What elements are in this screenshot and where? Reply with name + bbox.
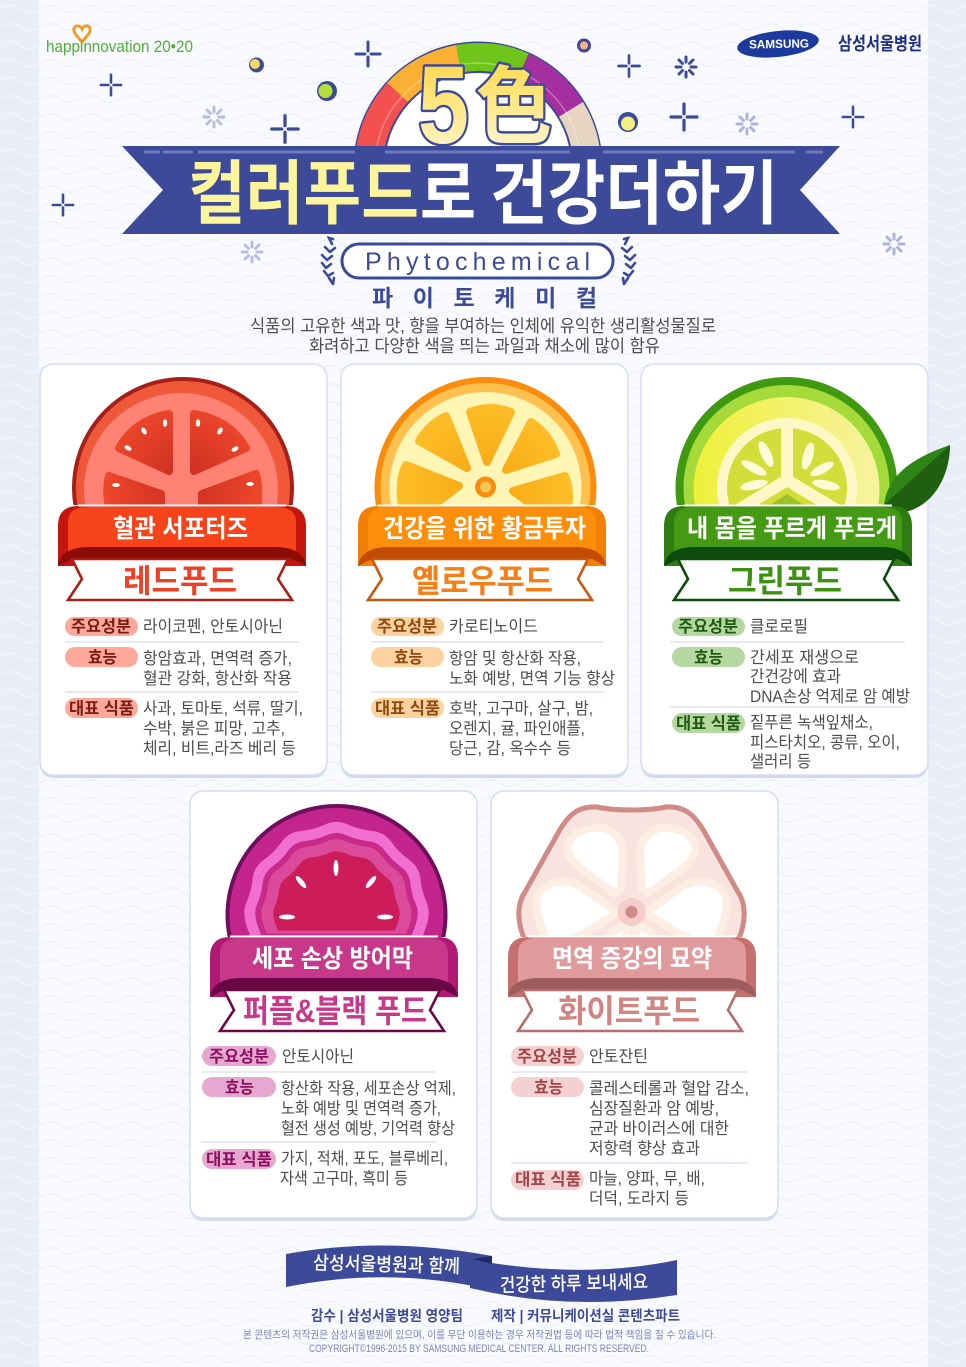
info: red food: 수박, 붉은 피망, 고추, — [143, 719, 285, 738]
info: white food: 마늘, 양파, 무, 배, — [589, 1169, 705, 1188]
ribbon: yellow: 옐로우푸드 — [412, 563, 553, 599]
info: green food: 대표 식품 — [676, 714, 741, 733]
description: 화려하고 다양한 색을 띄는 과일과 채소에 많이 함유 — [309, 336, 660, 356]
info: red food: 체리, 비트,라즈 베리 등 — [143, 739, 296, 758]
info: green food: 간건강에 효과 — [750, 667, 841, 686]
info: yellow food: 항암 및 항산화 작용, — [449, 649, 581, 668]
info: purple food — [201, 1046, 456, 1188]
description: 식품의 고유한 색과 맛, 향을 부여하는 인체에 유익한 생리활성물질로 — [250, 316, 716, 336]
decorative sparkles — [53, 38, 904, 262]
ribbon: red — [58, 506, 306, 600]
info: white food: 효능 — [534, 1078, 563, 1097]
info: red food — [65, 617, 303, 758]
info: yellow food: 호박, 고구마, 살구, 밤, — [449, 699, 593, 718]
ribbon: green — [664, 506, 912, 600]
ribbon: white — [508, 936, 756, 1031]
info: green food: 짙푸른 녹색잎채소, — [750, 713, 873, 732]
panel: purple and black food — [190, 791, 477, 1221]
info: yellow food: 효능 — [394, 648, 423, 667]
ribbon: green: 그린푸드 — [728, 563, 842, 599]
icon: orange slice — [374, 377, 596, 505]
info: yellow food: 당근, 감, 옥수수 등 — [449, 739, 571, 758]
logo: Samsung Medical Center: SAMSUNG — [749, 36, 809, 52]
panel: red food — [40, 364, 327, 778]
info: yellow food: 주요성분 — [377, 617, 437, 636]
ribbon: green: 내 몸을 푸르게 푸르게 — [687, 515, 897, 543]
icon: beet — [226, 804, 448, 937]
info: yellow food: 대표 식품 — [375, 699, 440, 718]
info: purple food: 노화 예방 및 면역력 증가, — [281, 1099, 441, 1118]
closing ribbon — [286, 1245, 677, 1302]
ribbon: yellow: 건강을 위한 황금투자 — [383, 515, 586, 543]
info: yellow food: 노화 예방, 면역 기능 향상 — [449, 669, 615, 688]
icon: leaf — [884, 445, 950, 512]
heading: 5 colors — [418, 40, 552, 167]
info: green food — [670, 617, 910, 771]
info: white food: 균과 바이러스에 대한 — [589, 1119, 729, 1138]
info: purple food: 가지, 적채, 포도, 블루베리, — [281, 1149, 448, 1168]
info: green food: 클로로필 — [750, 617, 808, 636]
title text: 로 — [420, 155, 476, 233]
Phytochemical pill: Phytochemical — [365, 248, 590, 276]
info: green food: 샐러리 등 — [750, 752, 811, 771]
description — [250, 316, 716, 356]
info: white food — [511, 1046, 749, 1208]
info: purple food: 자색 고구마, 흑미 등 — [280, 1169, 408, 1188]
info: purple food: 항산화 작용, 세포손상 억제, — [281, 1079, 456, 1098]
ribbon: purple — [210, 936, 458, 1031]
ribbon: white: 면역 증강의 묘약 — [552, 945, 712, 973]
info: red food: 주요성분 — [71, 617, 131, 636]
info: white food: 안토잔틴 — [589, 1047, 648, 1066]
ribbon: yellow — [358, 506, 606, 600]
info: white food: 더덕, 도라지 등 — [589, 1189, 689, 1208]
info: white food: 저항력 향상 효과 — [589, 1139, 700, 1158]
ribbon: red: 레드푸드 — [123, 563, 237, 599]
closing ribbon: 삼성서울병원과 함께 — [313, 1252, 460, 1278]
info: purple food: 효능 — [225, 1078, 254, 1097]
credits: 본 콘텐츠의 저작권은 삼성서울병원에 있으며, 이를 무단 이용하는 경우 저작권법 등에 따라 법적 책임을 질 수 있습니다. — [243, 1328, 716, 1341]
panel: white food — [491, 791, 778, 1221]
credits — [243, 1308, 716, 1355]
info: purple food: 주요성분 — [209, 1047, 269, 1066]
icon: cucumber — [676, 377, 897, 505]
title banner — [122, 146, 840, 234]
heading: 5 colors: 5 — [418, 44, 469, 167]
logo: Samsung Medical Center: 삼성서울병원 — [838, 34, 922, 54]
info: purple food: 대표 식품 — [206, 1150, 272, 1169]
info: red food: 대표 식품 — [69, 699, 134, 718]
info: white food: 주요성분 — [517, 1047, 577, 1066]
info: white food: 대표 식품 — [515, 1170, 581, 1189]
Phytochemical pill — [342, 244, 613, 278]
Korean subtitle: 파 이 토 케 미 컬 — [372, 285, 597, 311]
info: green food: 피스타치오, 콩류, 오이, — [750, 733, 900, 752]
logo: happinnovation 20+20: happinnovation 20•20 — [46, 37, 193, 56]
info: red food: 라이코펜, 안토시아닌 — [143, 617, 283, 636]
ribbon: purple: 퍼플&블랙 푸드 — [243, 993, 427, 1029]
title text: 건강더하기 — [490, 155, 778, 233]
credits: 감수 | 삼성서울병원 영양팀 — [311, 1308, 463, 1325]
ribbon: red: 혈관 서포터즈 — [113, 515, 248, 543]
panel: yellow food — [341, 364, 628, 778]
info: white food: 콜레스테롤과 혈압 감소, — [589, 1079, 749, 1098]
ribbon: purple: 세포 손상 방어막 — [252, 945, 413, 973]
info: red food: 혈관 강화, 항산화 작용 — [143, 669, 292, 688]
logo: Samsung Medical Center — [736, 27, 922, 61]
info: red food: 사과, 토마토, 석류, 딸기, — [143, 699, 303, 718]
info: red food: 항암효과, 면역력 증가, — [143, 649, 292, 668]
info: green food: 주요성분 — [678, 617, 738, 636]
title text: 컬러푸드 — [188, 155, 419, 233]
icon: tomato — [72, 377, 294, 505]
credits: 제작 | 커뮤니케이션실 콘텐츠파트 — [491, 1308, 680, 1325]
rainbow arc — [355, 42, 601, 146]
logo: happinnovation 20+20 — [46, 26, 193, 56]
credits: COPYRIGHT©1996-2015 BY SAMSUNG MEDICAL CENTER. ALL RIGHTS RESERVED. — [309, 1343, 649, 1355]
info: green food: 간세포 재생으로 — [750, 648, 859, 667]
panel: green food — [641, 364, 950, 778]
info: green food: DNA손상 억제로 암 예방 — [750, 687, 910, 706]
title text — [188, 155, 778, 233]
info: purple food: 혈전 생성 예방, 기억력 향상 — [281, 1119, 455, 1138]
info: red food: 효능 — [88, 648, 117, 667]
laurels — [322, 238, 635, 284]
info: yellow food — [371, 617, 615, 758]
info: green food: 효능 — [694, 648, 723, 667]
closing ribbon: 건강한 하루 보내세요 — [500, 1271, 648, 1297]
heading: 5 colors: 色 — [476, 40, 552, 161]
info: purple food: 안토시아닌 — [282, 1047, 354, 1066]
info: yellow food: 카로티노이드 — [449, 617, 538, 636]
info: white food: 심장질환과 암 예방, — [589, 1099, 719, 1118]
info: yellow food: 오렌지, 귤, 파인애플, — [449, 719, 585, 738]
ribbon: white: 화이트푸드 — [558, 993, 700, 1029]
icon: garlic slice — [519, 807, 744, 945]
